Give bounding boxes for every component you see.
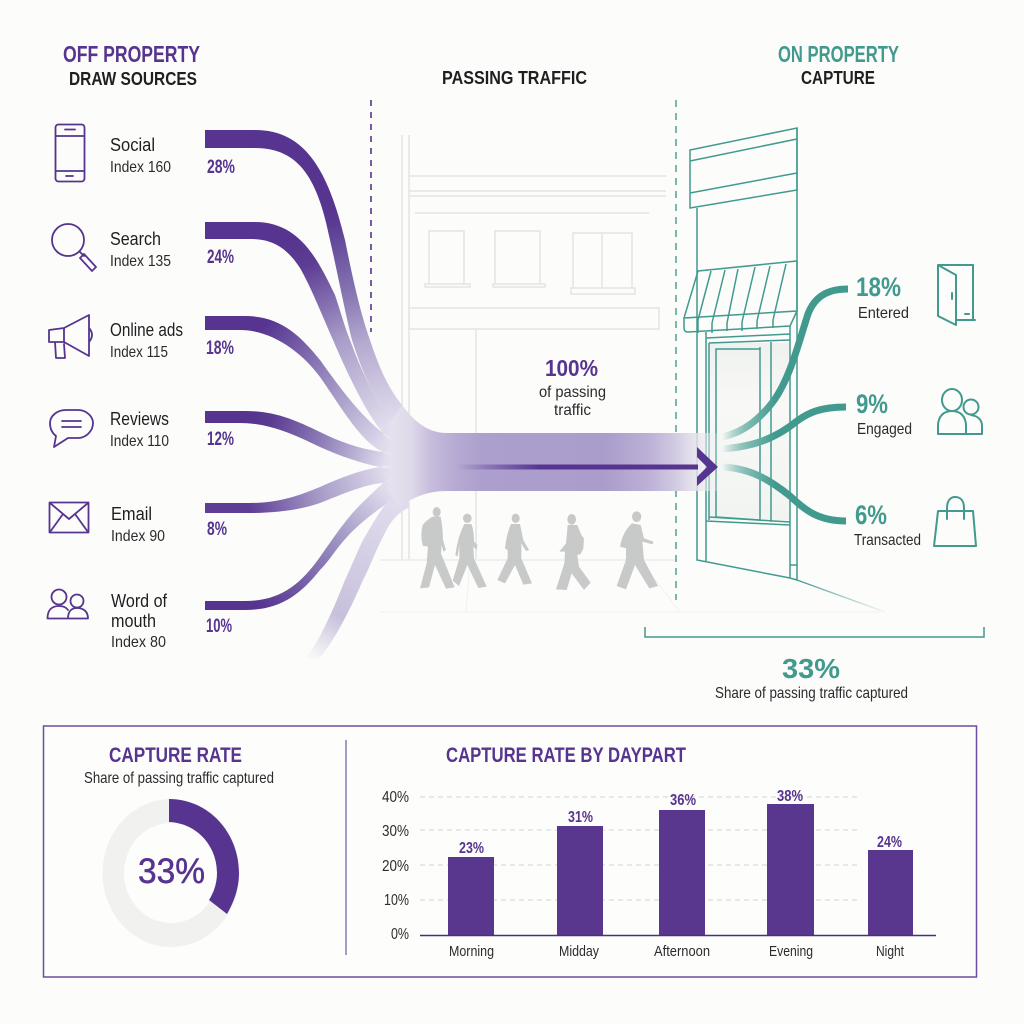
capture: engaged: Engaged	[857, 421, 912, 438]
icon: phone	[56, 124, 84, 182]
divider: on property boundary	[675, 100, 677, 600]
capture: transacted: Transacted	[854, 532, 921, 549]
icon: door	[938, 265, 975, 325]
pedestrians walking	[420, 507, 658, 590]
heading: off property draw sources: DRAW SOURCES	[69, 69, 197, 89]
callout: 33 percent captured	[715, 653, 908, 702]
capture flow: transacted	[722, 467, 846, 521]
pedestrian 5	[617, 511, 658, 589]
source: search: 24%	[207, 247, 234, 268]
panel: bottom metrics	[44, 726, 976, 977]
pedestrian 1	[420, 507, 455, 589]
category labels: Afternoon	[654, 943, 710, 960]
flow: word of mouth	[205, 475, 405, 610]
source: search	[52, 224, 234, 271]
source: online ads: Index 115	[110, 344, 168, 361]
capture: transacted	[854, 497, 976, 549]
y axis labels: 40%	[382, 789, 409, 806]
heading: on property capture	[778, 41, 899, 88]
value labels: 24%	[877, 834, 902, 851]
source: word of mouth	[48, 590, 232, 651]
value labels: 36%	[670, 792, 696, 809]
value labels: 23%	[459, 840, 484, 857]
category labels	[449, 943, 905, 960]
callout: 33 percent captured: Share of passing traffic captured	[715, 685, 908, 702]
icon: shopping bag	[934, 497, 976, 546]
donut chart: 33 percent: 33%	[138, 852, 205, 891]
bar chart: capture rate by daypart	[382, 788, 936, 960]
capture: entered: Entered	[858, 305, 909, 322]
icon: envelope	[50, 502, 88, 532]
source: social: 28%	[207, 157, 235, 178]
source: email: Index 90	[111, 528, 165, 545]
capture flow: engaged	[722, 407, 846, 449]
icon: megaphone	[49, 315, 92, 358]
source: social: Social	[110, 135, 155, 155]
y axis labels: 0%	[391, 926, 409, 943]
icon: people	[48, 590, 88, 618]
flow: reviews	[205, 411, 405, 467]
flow: search	[205, 222, 405, 445]
pedestrian 3	[497, 514, 532, 585]
pedestrian 2	[453, 514, 487, 588]
label: 100 percent of passing traffic	[539, 355, 606, 419]
y axis labels: 30%	[382, 823, 409, 840]
category labels: Night	[876, 943, 905, 960]
capture: entered	[856, 265, 975, 325]
source: email: Email	[111, 504, 152, 524]
source: reviews: Reviews	[110, 409, 169, 429]
source: search: Search	[110, 229, 161, 249]
source: reviews: Index 110	[110, 433, 169, 450]
source: reviews	[50, 409, 234, 450]
storefront line art	[684, 128, 797, 580]
flow: email	[205, 467, 405, 513]
source: word of mouth: mouth	[111, 611, 156, 631]
flow: social	[205, 130, 415, 440]
category labels: Midday	[559, 943, 599, 960]
center arrow	[457, 447, 718, 486]
heading: on property capture: CAPTURE	[801, 68, 875, 88]
pedestrian 4	[556, 514, 591, 590]
source: online ads: Online ads	[110, 320, 183, 340]
heading: on property capture: ON PROPERTY	[778, 41, 899, 67]
heading: passing traffic: PASSING TRAFFIC	[442, 68, 587, 88]
y axis labels: 20%	[382, 858, 409, 875]
value labels: 38%	[777, 788, 803, 805]
heading: capture rate: CAPTURE RATE	[109, 744, 242, 767]
icon: speech bubble	[50, 410, 93, 447]
value labels: 31%	[568, 809, 593, 826]
heading: off property draw sources	[63, 41, 200, 89]
source: word of mouth: Index 80	[111, 634, 166, 651]
source: search: Index 135	[110, 253, 171, 270]
bracket: share captured	[645, 627, 984, 637]
source: reviews: 12%	[207, 429, 234, 450]
background street building line art	[380, 135, 880, 612]
capture: engaged: 9%	[856, 389, 888, 419]
callout: 33 percent captured: 33%	[782, 653, 840, 684]
bars	[448, 804, 913, 935]
value labels	[459, 788, 902, 857]
source: social	[56, 124, 235, 182]
flow: online ads	[205, 316, 405, 455]
storefront pavement edge	[797, 580, 885, 612]
donut chart: 33 percent	[102, 799, 239, 947]
source: email	[50, 502, 227, 545]
capture: entered: 18%	[856, 272, 901, 302]
flow: extra unlabelled stream	[306, 480, 410, 660]
category labels: Morning	[449, 943, 494, 960]
capture flow: entered	[722, 289, 848, 437]
label: 100 percent of passing traffic: of passing	[539, 384, 606, 401]
heading: off property draw sources: OFF PROPERTY	[63, 41, 200, 67]
source: word of mouth: Word of	[111, 591, 168, 611]
central converging traffic band	[380, 405, 724, 507]
heading: capture rate	[84, 744, 274, 787]
icon: magnifier	[52, 224, 96, 271]
source: social: Index 160	[110, 159, 171, 176]
category labels: Evening	[769, 943, 813, 960]
source: word of mouth: 10%	[206, 616, 232, 637]
heading: capture rate: Share of passing traffic captured	[84, 770, 274, 787]
source: online ads	[49, 315, 234, 361]
divider: off property boundary	[370, 100, 372, 332]
label: 100 percent of passing traffic: traffic	[554, 402, 591, 419]
source: email: 8%	[207, 519, 227, 540]
heading: capture rate by daypart: CAPTURE RATE BY DAYPART	[446, 744, 686, 767]
capture: transacted: 6%	[855, 500, 887, 530]
y axis labels: 10%	[384, 892, 409, 909]
icon: people	[938, 389, 982, 434]
source: online ads: 18%	[206, 338, 234, 359]
label: 100 percent of passing traffic: 100%	[545, 355, 598, 381]
y axis labels	[382, 789, 409, 943]
capture: engaged	[856, 389, 982, 438]
